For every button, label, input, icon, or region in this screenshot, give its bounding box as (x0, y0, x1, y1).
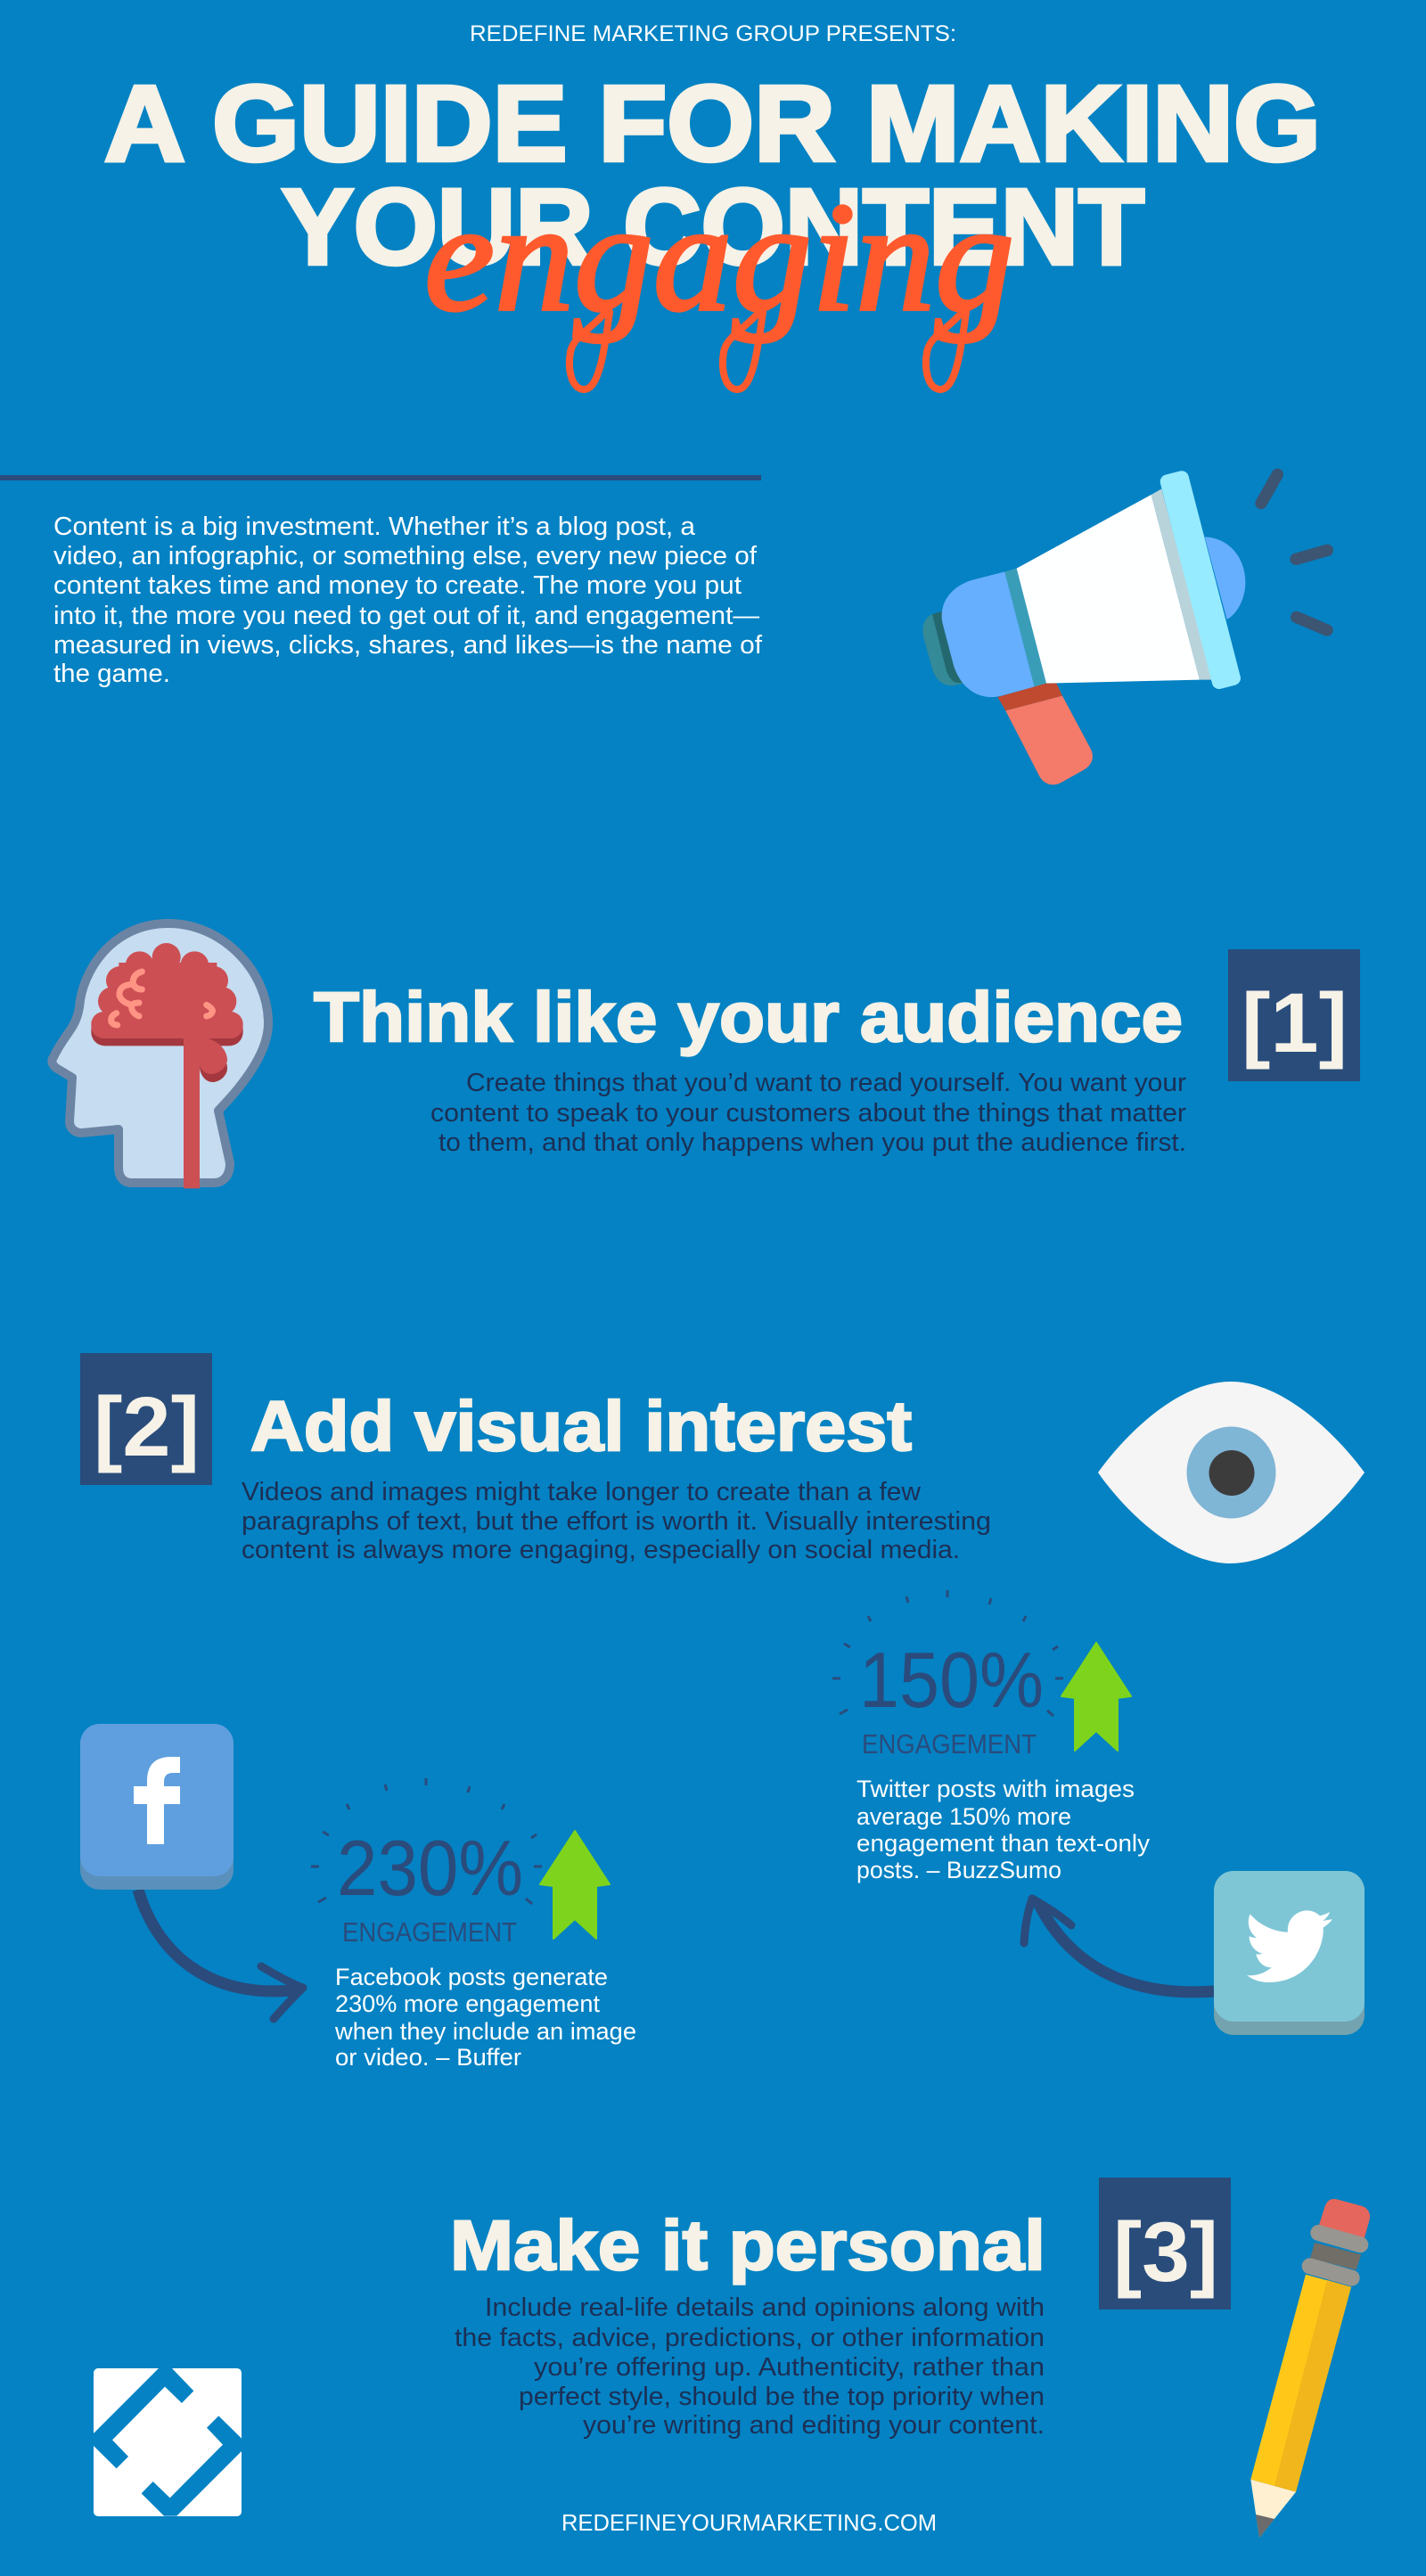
body text: Include real-life details and opinions along with (485, 2293, 1045, 2322)
arrow: twitter to stat (1024, 1899, 1214, 1992)
body text: paragraphs of text, but the effort is worth it. Visually interesting (242, 1507, 991, 1536)
stat: twitter 150 percent (832, 1590, 1365, 2035)
stat text: engagement than text-only (856, 1830, 1151, 1857)
body text: the facts, advice, predictions, or other information (455, 2324, 1045, 2352)
panel: introduction (0, 475, 763, 688)
title (104, 62, 1321, 287)
stat label: ENGAGEMENT (342, 1916, 517, 1948)
intro text: video, an infographic, or something else, every new piece of (53, 542, 758, 570)
stat: facebook 230 percent (80, 1724, 636, 2071)
icon: up arrow (540, 1831, 610, 1939)
body text (455, 2293, 1045, 2440)
icon: pencil (1250, 2199, 1370, 2538)
number badge 3: [3] (1113, 2205, 1218, 2300)
stat text (856, 1776, 1151, 1883)
panel: add visual interest (80, 1353, 1365, 2071)
heading: Make it personal (450, 2205, 1045, 2285)
number badge 1 (1228, 949, 1360, 1081)
title: YOUR CONTENT (282, 166, 1144, 287)
title: A GUIDE FOR MAKING (104, 62, 1321, 184)
body text: to them, and that only happens when you put the audience first. (438, 1128, 1186, 1157)
footer url: REDEFINEYOURMARKETING.COM (561, 2509, 937, 2536)
stat text: 230% more engagement (335, 1990, 600, 2017)
brain (91, 943, 243, 1188)
panel: make it personal (450, 2178, 1370, 2538)
body text: you’re offering up. Authenticity, rather than (534, 2353, 1045, 2382)
body text: content to speak to your customers about the things that matter (430, 1099, 1186, 1128)
panel: think like your audience (52, 923, 1360, 1188)
logo (94, 2368, 242, 2516)
icon: facebook tile (80, 1724, 234, 1890)
arrow: facebook to stat (138, 1890, 303, 2019)
body text (242, 1478, 991, 1564)
icon: up arrow (1061, 1643, 1131, 1751)
intro text: measured in views, clicks, shares, and likes—is the name of (53, 631, 763, 660)
number badge 1: [1] (1242, 976, 1348, 1071)
icon: head with brain (52, 923, 268, 1188)
title accent word (424, 171, 1014, 390)
presenter line: REDEFINE MARKETING GROUP PRESENTS: (470, 21, 956, 46)
stat text: when they include an image (334, 2018, 636, 2045)
intro text: content takes time and money to create. The more you put (53, 571, 742, 600)
stat text: posts. – BuzzSumo (856, 1857, 1061, 1883)
number badge 3 (1099, 2178, 1231, 2309)
body text: perfect style, should be the top priority when (519, 2383, 1045, 2411)
body text: Create things that you’d want to read yourself. You want your (466, 1069, 1186, 1097)
stat text: average 150% more (856, 1803, 1071, 1830)
body text (430, 1069, 1186, 1157)
heading: Add visual interest (250, 1386, 912, 1465)
intro text: into it, the more you need to get out of it, and engagement— (53, 602, 759, 630)
icon: eye (1098, 1382, 1365, 1563)
body text: you’re writing and editing your content. (583, 2411, 1045, 2440)
intro text (53, 513, 763, 688)
number badge 2 (80, 1353, 212, 1485)
burst ticks (311, 1778, 542, 1904)
stat text: Facebook posts generate (335, 1964, 608, 1990)
title accent word: engaging (424, 171, 1014, 344)
stat number: 150% (859, 1636, 1044, 1724)
burst ticks (832, 1590, 1063, 1716)
heading: Think like your audience (314, 977, 1183, 1056)
stat number: 230% (337, 1824, 523, 1912)
stat text: Twitter posts with images (856, 1776, 1135, 1802)
icon: twitter tile (1214, 1871, 1365, 2035)
intro text: Content is a big investment. Whether it’s a blog post, a (53, 513, 696, 541)
body text: content is always more engaging, especially on social media. (242, 1536, 960, 1564)
panel: header (104, 21, 1321, 390)
intro text: the game. (53, 660, 170, 688)
icon: megaphone (922, 470, 1327, 784)
number badge 2: [2] (94, 1380, 200, 1474)
stat text (334, 1964, 636, 2071)
stat label: ENGAGEMENT (862, 1728, 1037, 1760)
body text: Videos and images might take longer to create than a few (242, 1478, 922, 1506)
stat text: or video. – Buffer (335, 2044, 521, 2071)
